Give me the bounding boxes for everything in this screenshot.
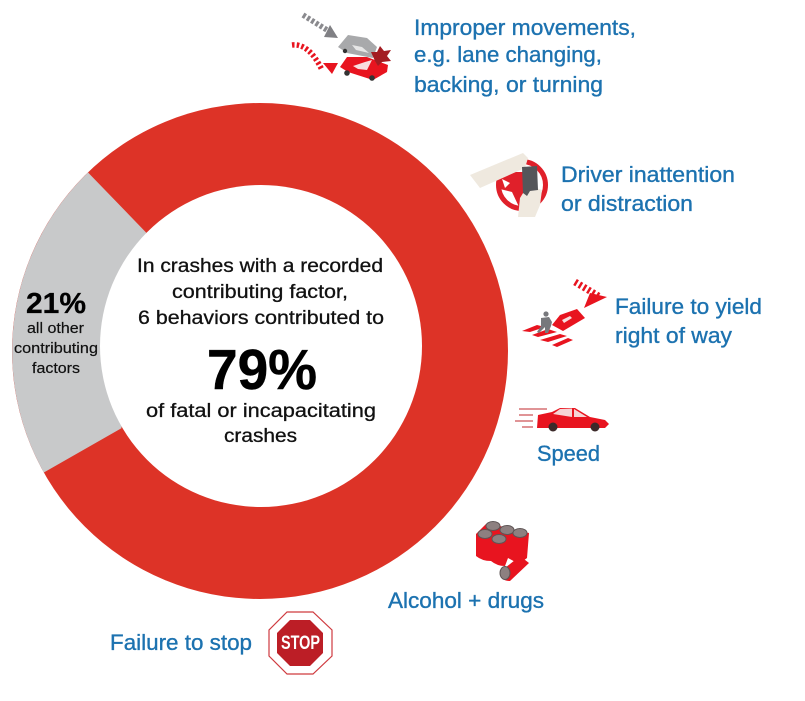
label: failure to yield: Failure to yield (615, 294, 762, 319)
icon: alcohol cans (476, 522, 529, 581)
donut chart (12, 103, 508, 599)
label: improper movements: backing, or turning (414, 72, 603, 97)
icon: driver distraction (470, 153, 546, 217)
icon: speeding car (515, 408, 609, 432)
center text: of fatal or incapacitating (146, 400, 376, 422)
label: improper movements: e.g. lane changing, (414, 42, 602, 67)
donut hole (100, 185, 422, 507)
gray segment label: contributing (14, 340, 98, 357)
center text: contributing factor, (172, 281, 348, 303)
segment: 21% all other factors (13, 173, 146, 472)
icon: stop sign: STOP (281, 632, 320, 654)
center text (137, 255, 384, 447)
center text: crashes (224, 425, 297, 447)
label: improper movements: Improper movements, (414, 15, 636, 40)
icon: stop sign (269, 612, 332, 674)
gray segment label: factors (32, 360, 80, 377)
center text: In crashes with a recorded (137, 255, 383, 277)
center text: 6 behaviors contributed to (138, 307, 384, 329)
icon: car collision (292, 15, 391, 81)
gray segment label: all other (27, 320, 84, 337)
icon: failure to yield (522, 282, 607, 347)
label: alcohol + drugs: Alcohol + drugs (388, 588, 544, 613)
label: driver inattention: Driver inattention (561, 162, 735, 187)
label: driver inattention: or distraction (561, 191, 693, 216)
gray segment label (14, 288, 98, 377)
big number 79%: 79% (207, 338, 317, 402)
label: driver inattention (561, 162, 735, 216)
label: failure to stop: Failure to stop (110, 630, 252, 655)
label: failure to yield: right of way (615, 323, 732, 348)
label: failure to yield (615, 294, 762, 348)
segment: 79% six behaviors (12, 103, 508, 599)
label: speed: Speed (537, 441, 600, 466)
gray segment label: 21% (26, 288, 86, 320)
label: improper movements (414, 15, 636, 97)
